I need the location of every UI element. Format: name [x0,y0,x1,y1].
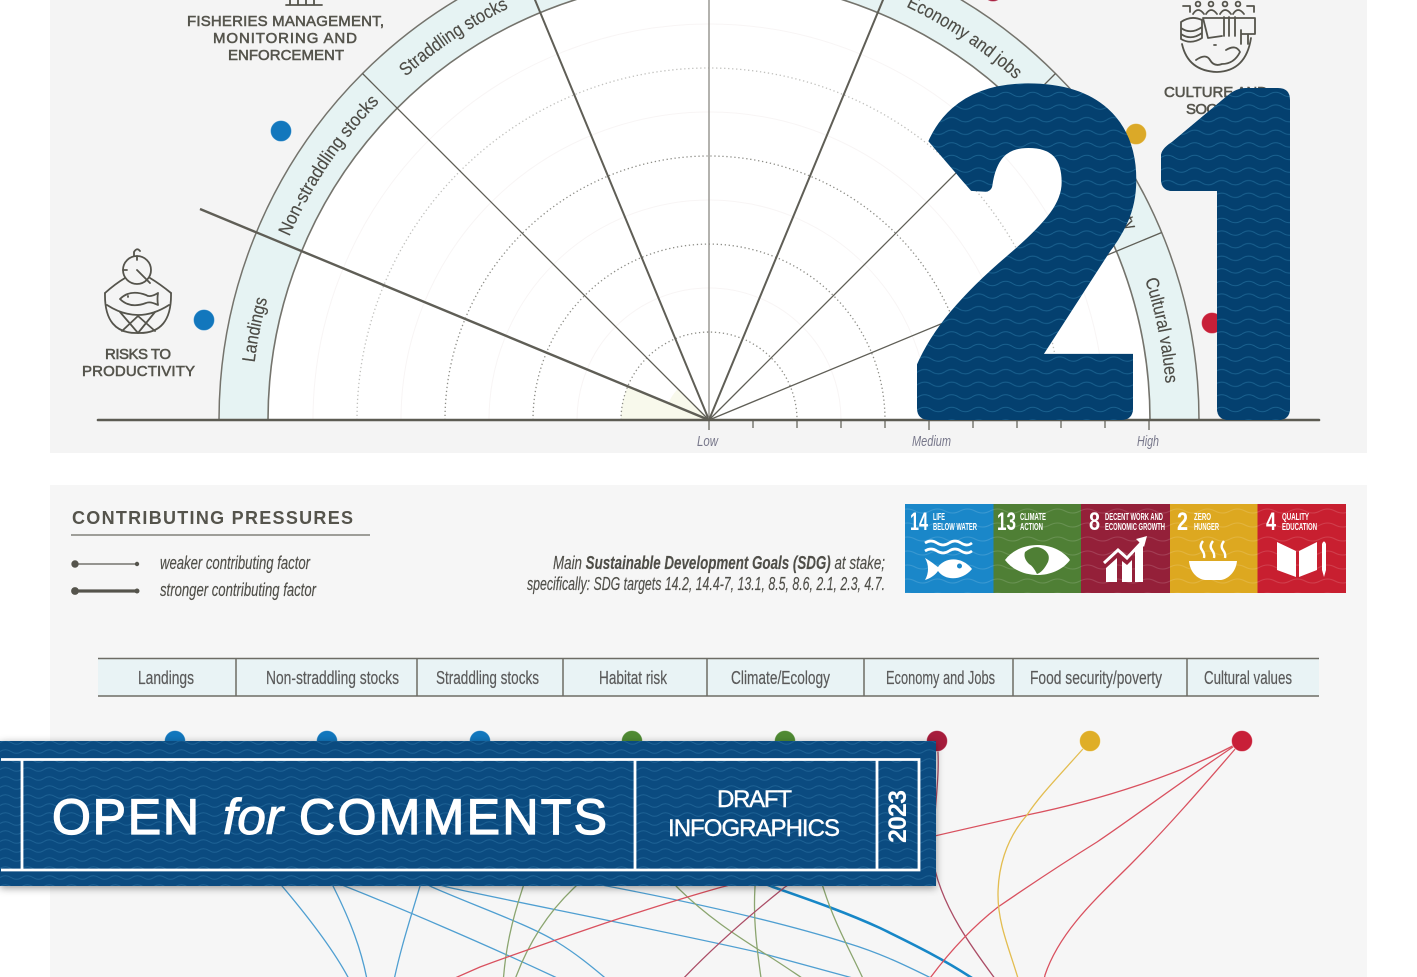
connection curves [175,741,1242,977]
tile: SDG 13: 13 [997,508,1016,536]
legend text: weaker contributing factor [160,553,311,573]
heading: contributing pressures: CONTRIBUTING PRESSURES [72,508,353,528]
banner title: COMMENTS [299,789,607,845]
band labels: Non-straddling stocks [278,96,378,236]
panel: contributing pressures background [50,485,1367,977]
blue curves [175,741,975,977]
band labels: Food security/poverty [1124,216,1136,228]
caption: risks to productivity: RISKS TO [105,346,171,363]
tile: SDG 4: 4 [1266,508,1276,536]
legend text: stronger contributing factor [160,580,317,600]
tile: SDG 2: ZERO [1194,511,1211,523]
tile: SDG 4: EDUCATION [1282,521,1317,533]
tile: SDG 2: HUNGER [1194,521,1219,533]
band labels: Landings [242,298,268,362]
yellow curve [998,741,1090,977]
caption: fisheries management: FISHERIES MANAGEMENT, [187,13,384,30]
tile: SDG 8: DECENT WORK AND [1105,511,1163,523]
tile: SDG 13 [994,504,1081,593]
stronger factor [71,587,140,595]
caption: fisheries management: ENFORCEMENT [228,47,344,64]
text: SDGs at stake [527,553,885,594]
radial pressure chart [96,0,1320,450]
SDG tiles [905,504,1346,593]
table header: pressure categories [98,658,1319,696]
axis labels [697,433,1159,450]
axis labels: Low [697,433,719,450]
category dots on flow chart [164,730,1252,752]
banner year: 2023 [884,790,912,843]
tile: SDG 4: QUALITY [1282,511,1309,523]
banner: open for comments [0,741,936,886]
category labels: Habitat risk [599,667,668,688]
caption: culture and society: CULTURE AND [1164,84,1268,101]
legend: line weights [71,553,317,600]
tile: SDG 14 [905,504,994,593]
outer label band [219,0,1199,420]
tile: SDG 8: 8 [1089,508,1100,536]
banner frame [1,760,919,870]
category labels: Non-straddling stocks [266,667,399,688]
banner subtitle: INFOGRAPHICS [668,815,840,842]
axis labels: High [1137,433,1159,450]
spokes: contributing factors [200,0,1162,420]
category labels: Cultural values [1204,667,1292,688]
band labels: Cultural values [1146,278,1176,383]
tile: SDG 13: CLIMATE [1020,511,1046,523]
tile: SDG 8: ECONOMIC GROWTH [1105,521,1165,533]
caption: risks to productivity [82,346,195,380]
icon: culture and society [1181,2,1255,72]
concentric rings [313,24,1105,420]
icon: fisheries management (cropped) [286,0,322,5]
band labels [242,0,1176,383]
panel: pressure chart background [50,0,1367,453]
caption: fisheries management [187,13,384,64]
baseline axis with ticks [98,420,1319,430]
tile: SDG 2: 2 [1177,508,1188,536]
tile: SDG 2 [1170,504,1258,593]
weaker factor [71,560,139,568]
digit 2 [917,83,1136,420]
low-pressure highlighted sectors [621,386,709,420]
tile: SDG 4 [1258,504,1346,593]
axis labels: Medium [912,433,951,450]
green curves [503,741,866,977]
maroon curves [680,741,996,977]
digit 2: 2 [907,0,1152,511]
tile: SDG 14: 14 [910,508,928,536]
big number 21 [917,83,1290,420]
text: SDGs at stake: Main Sustainable Development Goals (SDG) at stake; [553,553,885,573]
category labels: Straddling stocks [436,667,539,688]
category labels: Economy and Jobs [886,667,995,688]
banner subtitle [668,786,840,842]
tile: SDG 14: BELOW WATER [933,521,977,533]
digit 1: 1 [1130,0,1350,546]
banner title: for [223,789,285,845]
category labels: Climate/Ecology [731,667,831,688]
tile: SDG 14: LIFE [933,511,945,523]
legend text [160,553,317,600]
category labels [138,667,1292,688]
caption: culture and society: SOCIETY [1186,101,1248,118]
caption: risks to productivity: PRODUCTIVITY [82,363,195,380]
tile: SDG 8 [1081,504,1170,593]
caption: fisheries management: MONITORING AND [213,30,357,47]
red curves [455,741,1242,977]
banner title [52,789,607,845]
icon: risks to productivity [105,249,171,333]
banner title: OPEN [52,789,199,845]
banner subtitle: DRAFT [717,786,792,813]
caption: culture and society [1164,84,1268,118]
inner chart area [268,0,1150,420]
category labels: Food security/poverty [1030,667,1163,688]
category labels: Landings [138,667,194,688]
text: SDGs at stake: specifically: SDG targets 14.2, 14.4-7, 13.1, 8.5, 8.6, 2.1, 2.3, 4.7. [527,574,885,594]
category dots around chart [194,0,1222,334]
tile: SDG 13: ACTION [1020,521,1043,533]
